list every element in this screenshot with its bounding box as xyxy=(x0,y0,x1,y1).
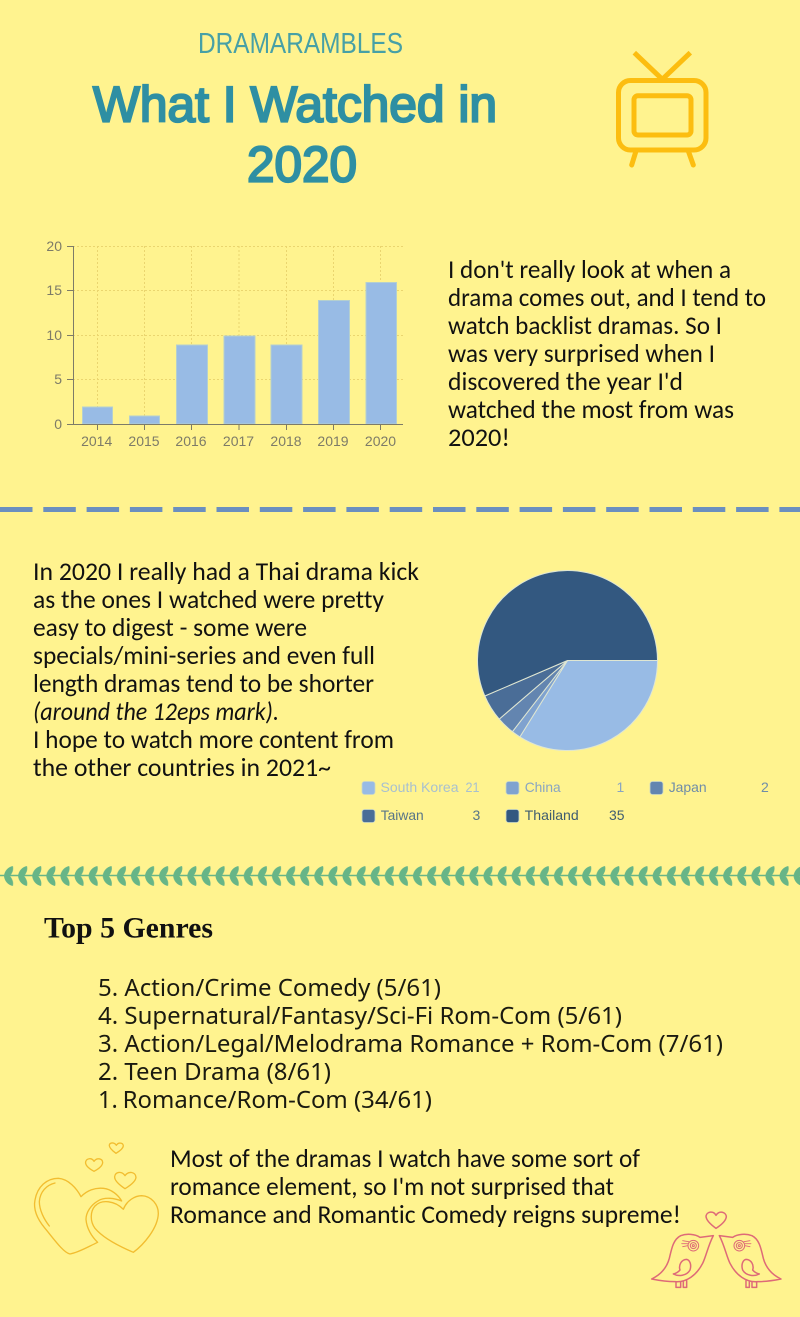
text block: release year comment: was very surprised when I xyxy=(448,338,715,369)
icon: television xyxy=(618,53,706,165)
text block: release year comment: discovered the year I'd xyxy=(448,366,683,397)
text block: release year comment xyxy=(448,254,766,453)
genre ranking list: 5. Action/Crime Comedy (5/61) xyxy=(98,971,441,1003)
bar chart: dramas watched by release year: 5 xyxy=(54,371,62,387)
text block: Thai drama comment: the other countries in 2021~ xyxy=(33,752,331,783)
pie legend: China xyxy=(525,779,561,795)
bar chart: dramas watched by release year: 0 xyxy=(54,416,62,432)
text block: release year comment: I don't really look at when a xyxy=(448,254,731,285)
pie chart: dramas by country xyxy=(478,570,658,751)
text block: romance comment: Most of the dramas I watch have some sort of xyxy=(170,1143,640,1174)
genre ranking list: 4. Supernatural/Fantasy/Sci-Fi Rom-Com (5/61) xyxy=(98,999,622,1031)
title xyxy=(93,76,497,192)
bar chart: dramas watched by release year: 2015 xyxy=(128,433,160,449)
genre ranking list xyxy=(98,971,723,1115)
pie legend: 1 xyxy=(616,779,624,795)
bar chart: dramas watched by release year xyxy=(46,238,403,449)
pie legend: South Korea xyxy=(380,779,459,795)
text block: release year comment: 2020! xyxy=(448,422,510,453)
bar chart: dramas watched by release year: 2016 xyxy=(175,433,207,449)
text block: Thai drama comment xyxy=(33,556,419,783)
text block: release year comment: drama comes out, and I tend to xyxy=(448,282,766,313)
pie legend: 3 xyxy=(472,807,480,823)
genre ranking list: 3. Action/Legal/Melodrama Romance + Rom-Com (7/61) xyxy=(98,1027,723,1059)
genre ranking list: 2. Teen Drama (8/61) xyxy=(98,1055,331,1087)
pie legend: Thailand xyxy=(525,807,579,823)
bar chart: dramas watched by release year: 2019 xyxy=(317,433,349,449)
text block: Thai drama comment: I hope to watch more content from xyxy=(33,724,394,755)
bar chart: dramas watched by release year: 10 xyxy=(46,327,62,343)
text block: Thai drama comment: specials/mini-series and even full xyxy=(33,640,375,671)
text block: Thai drama comment: as the ones I watched were pretty xyxy=(33,584,384,615)
text block: release year comment: watched the most from was xyxy=(448,394,734,425)
text block: romance comment: Romance and Romantic Comedy reigns supreme! xyxy=(170,1199,681,1230)
bar chart: dramas watched by release year: 2020 xyxy=(365,433,396,449)
pie legend: 21 xyxy=(466,779,480,795)
icon: love birds with heart xyxy=(652,1212,781,1287)
bar chart: dramas watched by release year: 20 xyxy=(46,238,62,254)
bar chart: dramas watched by release year: 2014 xyxy=(81,433,112,449)
genre ranking list: 1. xyxy=(98,1083,118,1115)
text block: Thai drama comment: length dramas tend to be shorter xyxy=(33,668,374,699)
text block: Thai drama comment: (around the 12eps mark). xyxy=(33,696,279,727)
title: What I Watched in xyxy=(93,76,497,132)
icon: hearts xyxy=(35,1143,158,1254)
heading: top 5 genres: Top 5 Genres xyxy=(44,912,213,944)
text block: romance comment: romance element, so I'm not surprised that xyxy=(170,1171,614,1202)
title: 2020 xyxy=(247,136,357,192)
genre ranking list: Romance/Rom-Com (34/61) xyxy=(123,1083,432,1115)
pie legend xyxy=(362,779,769,823)
pie legend: Japan xyxy=(669,779,707,795)
text block: Thai drama comment: In 2020 I really had a Thai drama kick xyxy=(33,556,419,587)
pie legend: 35 xyxy=(609,807,625,823)
brand name: DRAMARAMBLES xyxy=(198,28,403,60)
text block: Thai drama comment: easy to digest - some were xyxy=(33,612,307,643)
bar chart: dramas watched by release year: 2017 xyxy=(223,433,254,449)
bar chart: dramas watched by release year: 2018 xyxy=(270,433,302,449)
pie legend: Taiwan xyxy=(381,807,424,823)
text block: romance comment xyxy=(170,1143,681,1230)
pie legend: 2 xyxy=(761,779,769,795)
text block: release year comment: watch backlist dramas. So I xyxy=(448,310,722,341)
bar chart: dramas watched by release year: 15 xyxy=(46,282,62,298)
